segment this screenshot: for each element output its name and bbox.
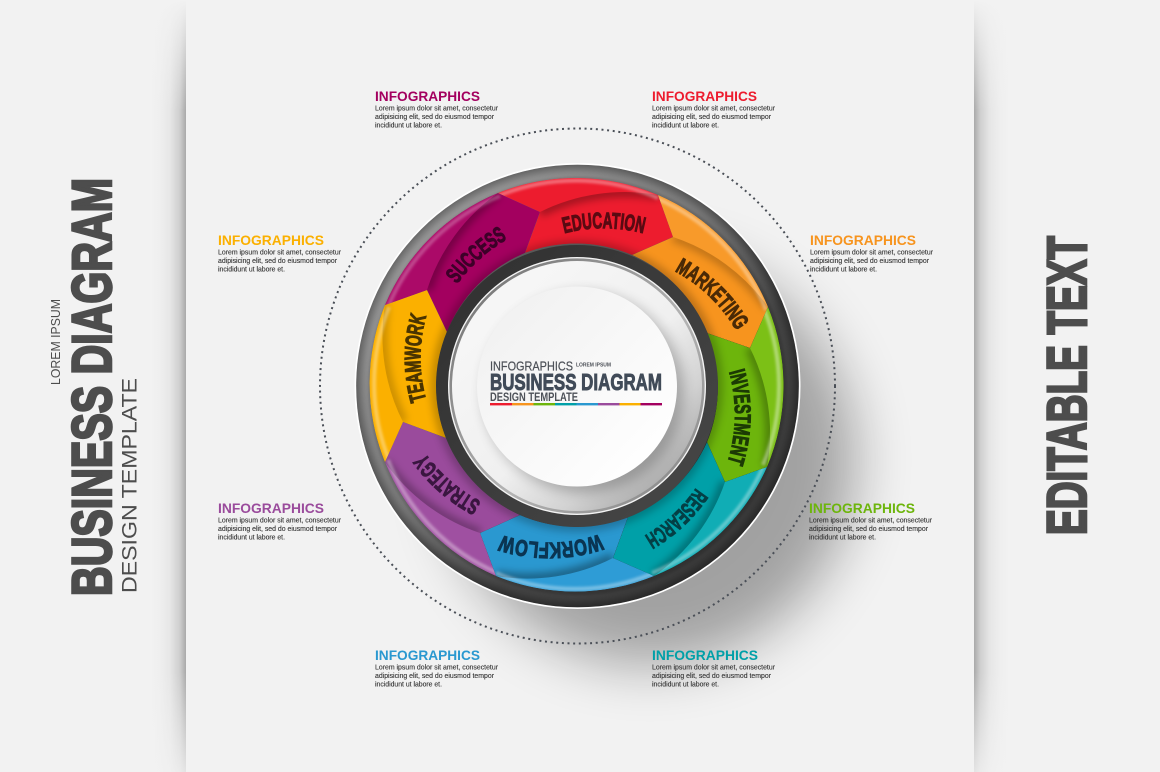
callout: teal bottom right: [652, 647, 776, 688]
subheading: design template: DESIGN TEMPLATE: [118, 378, 142, 593]
callout: green lower right: [809, 500, 933, 542]
callout: yellow upper left: Lorem ipsum dolor sit amet, consectetur: [218, 250, 342, 256]
callout: orange upper right: INFOGRAPHICS: [810, 232, 916, 248]
callout: red top right: [652, 88, 776, 130]
label: strategy: STRATEGY: [412, 456, 480, 514]
segment: investment: [707, 307, 784, 482]
dotted orbit circle: [320, 128, 835, 644]
left panel edge shadow: [150, 0, 186, 772]
centre design template line: DESIGN TEMPLATE: [490, 392, 578, 404]
callout: magenta top left: incididunt ut labore et.: [375, 122, 442, 130]
callout: green lower right: INFOGRAPHICS: [809, 500, 915, 516]
segment: research: [613, 442, 767, 576]
callout: magenta top left: INFOGRAPHICS: [375, 88, 480, 104]
segment: success: [385, 193, 540, 332]
label: investment: INVESTMENT: [728, 368, 752, 468]
callout: purple lower left: INFOGRAPHICS: [218, 500, 324, 516]
callout: purple lower left: adipisicing elit, sed do eiusmod tempor: [218, 526, 338, 533]
callout: yellow upper left: INFOGRAPHICS: [218, 232, 324, 248]
centre lorem ipsum: LOREM IPSUM: [576, 362, 611, 368]
right panel edge shadow: [974, 0, 1010, 772]
heading: business diagram: BUSINESS DIAGRAM: [60, 178, 123, 596]
segment: education: [498, 178, 673, 255]
segment: strategy: [385, 422, 520, 576]
callout: orange upper right: Lorem ipsum dolor sit amet, consectetur: [810, 250, 934, 256]
label: success: SUCCESS: [446, 226, 506, 283]
callout: blue bottom left: incididunt ut labore et.: [375, 682, 442, 688]
callout: orange upper right: [810, 232, 934, 274]
centre infographics line: INFOGRAPHICS: [490, 360, 573, 374]
left vertical title block: [48, 178, 142, 596]
label: marketing: MARKETING: [674, 258, 748, 330]
callout: teal bottom right: incididunt ut labore et.: [652, 682, 719, 688]
inner dark ring: [431, 240, 723, 532]
callout: magenta top left: adipisicing elit, sed do eiusmod tempor: [375, 114, 495, 121]
callout: yellow upper left: adipisicing elit, sed do eiusmod tempor: [218, 258, 338, 265]
callout: purple lower left: incididunt ut labore et.: [218, 534, 285, 542]
segment labels: [404, 212, 752, 559]
callout: magenta top left: Lorem ipsum dolor sit amet, consectetur: [375, 106, 499, 112]
segment: marketing: [632, 195, 768, 348]
callout: blue bottom left: Lorem ipsum dolor sit amet, consectetur: [375, 664, 499, 672]
callout: orange upper right: incididunt ut labore et.: [810, 266, 877, 274]
label: education: EDUCATION: [561, 212, 646, 234]
callout: purple lower left: [218, 500, 342, 542]
centre colour bar: [490, 403, 662, 405]
callout: yellow upper left: incididunt ut labore et.: [218, 266, 285, 274]
centre business diagram heading: BUSINESS DIAGRAM: [490, 369, 662, 395]
callout: blue bottom left: [375, 647, 499, 688]
callout: red top right: adipisicing elit, sed do eiusmod tempor: [652, 114, 772, 121]
callout: red top right: INFOGRAPHICS: [652, 88, 757, 104]
label: research: RESEARCH: [644, 488, 709, 550]
callout: red top right: Lorem ipsum dolor sit amet, consectetur: [652, 106, 776, 112]
callout: teal bottom right: adipisicing elit, sed do eiusmod tempor: [652, 673, 772, 680]
right vertical title: editable text: EDITABLE TEXT: [1035, 236, 1098, 535]
callout: purple lower left: Lorem ipsum dolor sit amet, consectetur: [218, 518, 342, 524]
label: workflow: WORKFLOW: [497, 534, 605, 559]
segmented colour wheel: [370, 178, 784, 592]
callout: blue bottom left: adipisicing elit, sed do eiusmod tempor: [375, 673, 495, 680]
callout: green lower right: Lorem ipsum dolor sit amet, consectetur: [809, 518, 933, 524]
wheel drop shadow: [445, 255, 855, 665]
subheading: lorem ipsum: LOREM IPSUM: [48, 299, 63, 385]
label: teamwork: TEAMWORK: [404, 312, 427, 404]
centre title block: [490, 360, 662, 405]
central plate and disc: [452, 261, 702, 511]
outer grey ring: [354, 163, 800, 609]
callout: magenta top left: [375, 88, 499, 130]
callout: blue bottom left: INFOGRAPHICS: [375, 647, 480, 663]
callout: teal bottom right: Lorem ipsum dolor sit amet, consectetur: [652, 664, 776, 672]
segment: workflow: [480, 515, 654, 592]
callout: green lower right: incididunt ut labore et.: [809, 534, 876, 542]
callout: yellow upper left: [218, 232, 342, 274]
callout: green lower right: adipisicing elit, sed do eiusmod tempor: [809, 526, 929, 533]
callout: red top right: incididunt ut labore et.: [652, 122, 719, 130]
callout: orange upper right: adipisicing elit, sed do eiusmod tempor: [810, 258, 930, 265]
callout: teal bottom right: INFOGRAPHICS: [652, 647, 758, 663]
segment: teamwork: [370, 290, 447, 462]
